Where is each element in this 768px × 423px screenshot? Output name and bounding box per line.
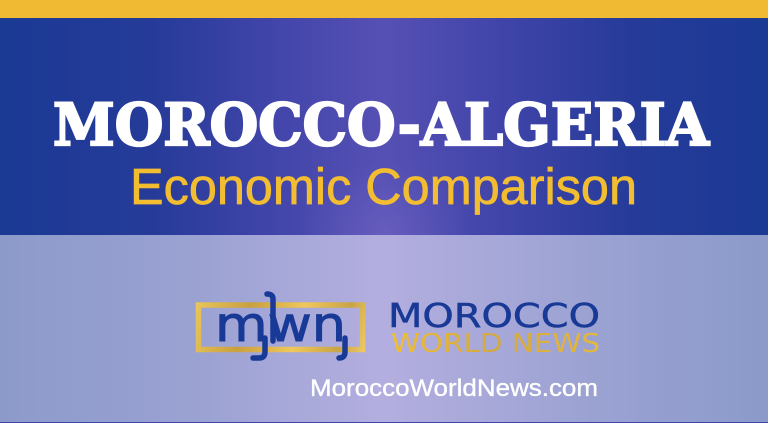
panel: blue title background xyxy=(0,18,768,310)
emblem letters: mwn xyxy=(215,297,346,353)
panel: lilac logo background xyxy=(0,235,768,422)
subtitle: Economic Comparison xyxy=(130,158,637,215)
title: MOROCCO-ALGERIA xyxy=(53,91,710,159)
emblem letter tails xyxy=(253,294,345,358)
emblem gold frame xyxy=(198,305,362,350)
logo: mwn emblem xyxy=(198,294,362,358)
bottom edge line xyxy=(0,422,768,423)
logo wordmark: World News: WORLD NEWS xyxy=(391,329,600,359)
top gold bar xyxy=(0,0,768,18)
logo wordmark: Morocco: MOROCCO xyxy=(388,296,600,335)
website address: MoroccoWorldNews.com xyxy=(310,375,598,402)
